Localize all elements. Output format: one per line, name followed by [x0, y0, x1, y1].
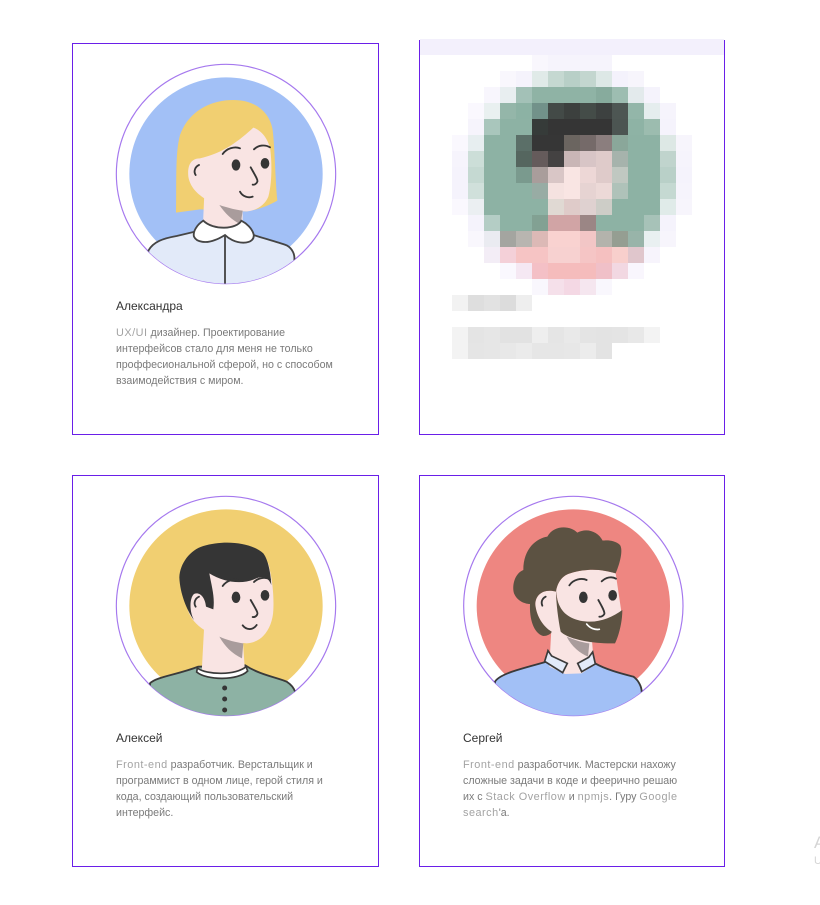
icon: Alexey avatar: [116, 496, 336, 716]
heading: Sergey name: Сергей: [463, 731, 503, 745]
text: Alexey description: программист в одном лице, герой стиля и: [116, 775, 323, 787]
text: Alexey description: интерфейс.: [116, 807, 173, 819]
icon: pixelated avatar and blurred text: [420, 39, 724, 359]
heading: Alexey name: Алексей: [116, 731, 162, 745]
text: clipped text at right edge: [814, 834, 820, 867]
panel: Alexey card: [72, 475, 379, 867]
panel: blurred card: [419, 40, 725, 435]
text: Alexey description: Front-end разработчик. Верстальщик и: [116, 759, 313, 771]
heading: Alexandra name: Александра: [116, 299, 183, 313]
panel: Alexandra card: [72, 43, 379, 435]
text: Alexandra description: UX/UI дизайнер. Проектирование: [116, 327, 285, 339]
text: Alexandra description: интерфейсов стало для меня не только: [116, 343, 313, 355]
text: Sergey description: [463, 759, 678, 819]
text: Alexandra description: взаимодействия с миром.: [116, 375, 244, 387]
text: Alexandra description: проффесиональной сферой, но с способом: [116, 359, 333, 371]
text: Sergey description: их с Stack Overflow и npmjs. Гуру Google: [463, 791, 678, 803]
text: Alexey description: кода, создающий пользовательский: [116, 791, 293, 803]
text: Sergey description: Front-end разработчик. Мастерски нахожу: [463, 759, 676, 771]
panel: Sergey card: [419, 475, 725, 867]
icon: Alexandra avatar: [116, 64, 336, 284]
text: Sergey description: сложные задачи в коде и феерично решаю: [463, 775, 677, 787]
icon: Sergey avatar: [463, 496, 684, 716]
text: Alexey description: [116, 759, 323, 819]
text: Alexandra description: [116, 327, 333, 387]
text: Sergey description: search'а.: [463, 807, 510, 819]
